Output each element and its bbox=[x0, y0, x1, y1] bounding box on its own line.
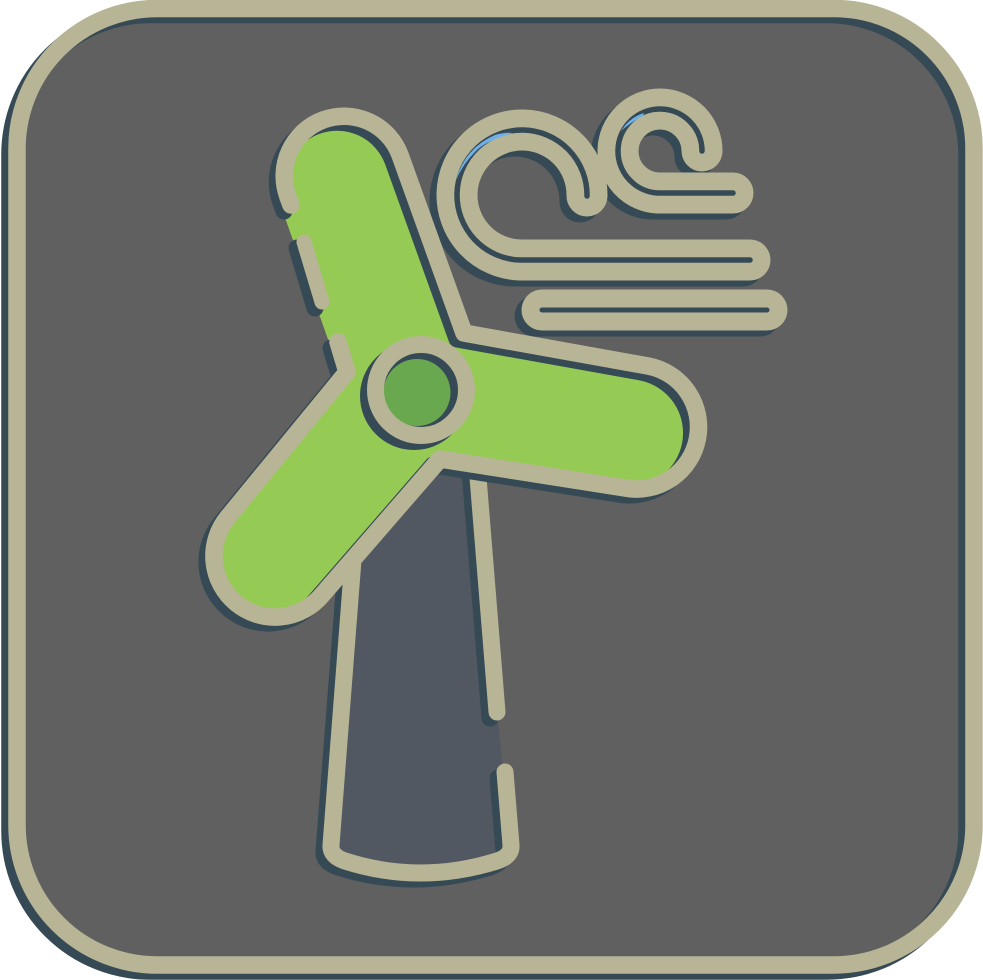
turbine blades fill bbox=[214, 116, 699, 617]
straight gust bbox=[542, 290, 767, 330]
blade dash bbox=[304, 242, 322, 302]
turbine blades shadow bbox=[207, 122, 692, 623]
turbine tower outline bbox=[331, 465, 511, 873]
turbine tower fill bbox=[331, 459, 511, 873]
lower long gust bbox=[456, 130, 750, 260]
icon: turbine blades outline bbox=[214, 116, 699, 617]
turbine tower shadow bbox=[324, 471, 504, 879]
upper curled gust bbox=[618, 109, 733, 193]
icon: turbine hub bbox=[368, 344, 466, 442]
icon: wind gust lines bbox=[456, 109, 767, 310]
blades outline bbox=[214, 116, 699, 617]
wind lines shadow bbox=[450, 115, 760, 316]
